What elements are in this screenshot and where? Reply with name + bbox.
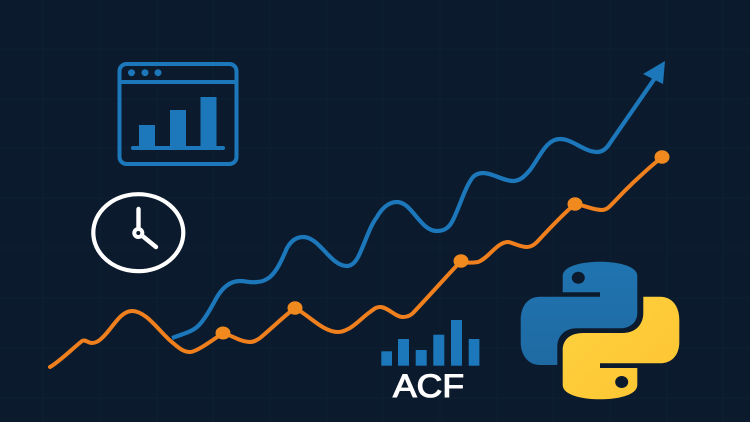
icon: Python logo (521, 262, 679, 399)
ACF bar chart with label: ACF (393, 368, 464, 404)
icon: browser window with bar chart (120, 64, 236, 164)
icon: clock (93, 194, 183, 271)
line chart: blue trend with arrow (172, 61, 665, 338)
ACF bar chart with label (381, 320, 479, 404)
line chart: orange series with markers (50, 150, 670, 367)
